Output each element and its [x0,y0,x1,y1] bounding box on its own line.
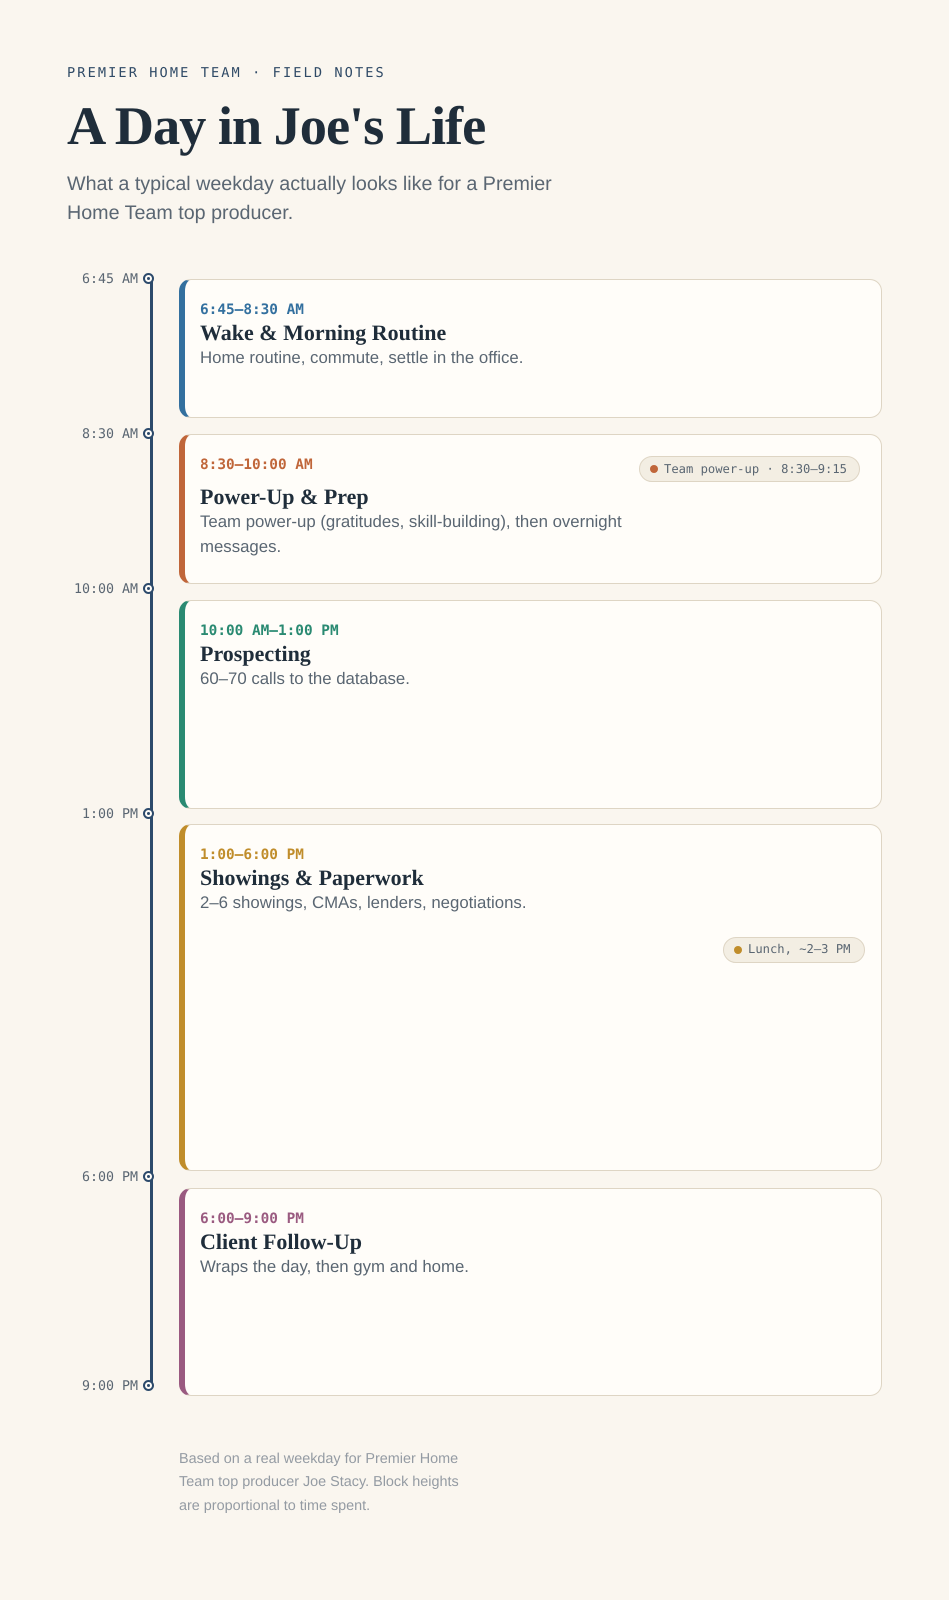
timeline axis [150,278,153,1385]
timeline marker: 8:30 AM [143,428,154,439]
block heading: Prospecting [200,641,311,666]
block heading: Wake & Morning Routine [200,320,446,345]
time range: 6:00–9:00 PM [200,1210,304,1226]
callout: lunch: Lunch, ~2–3 PM [748,942,850,956]
time label: 8:30 AM: 8:30 AM [82,427,138,442]
time label: 10:00 AM: 10:00 AM [74,582,138,597]
panel: client follow-up [179,1188,882,1396]
time label: 9:00 PM: 9:00 PM [82,1379,138,1394]
description: 2–6 showings, CMAs, lenders, negotiations. [200,893,526,912]
description: Home routine, commute, settle in the office. [200,348,523,367]
panel: power-up and prep [179,434,882,584]
block heading: Client Follow-Up [200,1229,362,1254]
callout: lunch [723,937,865,963]
time label: 6:00 PM: 6:00 PM [82,1170,138,1185]
time label: 6:45 AM: 6:45 AM [82,272,138,287]
description: 60–70 calls to the database. [200,669,410,688]
block heading: Power-Up & Prep [200,484,369,509]
description: Team power-up (gratitudes, skill-building), then overnight messages. [200,512,622,556]
time label: 1:00 PM: 1:00 PM [82,807,138,822]
panel: wake and morning routine [179,279,882,418]
timeline marker: 10:00 AM [143,583,154,594]
panel: prospecting [179,600,882,809]
callout: team power-up [639,456,860,482]
time range: 8:30–10:00 AM [200,456,313,472]
footnote: Based on a real weekday for Premier Home Team top producer Joe Stacy. Block heights are proportional to time spent. [179,1451,459,1514]
timeline marker: 6:00 PM [143,1171,154,1182]
timeline marker: 1:00 PM [143,808,154,819]
block heading: Showings & Paperwork [200,865,424,890]
subtitle: What a typical weekday actually looks like for a Premier Home Team top producer. [67,172,552,224]
panel: showings and paperwork [179,824,882,1171]
timeline marker: 9:00 PM [143,1380,154,1391]
title: A Day in Joe's Life [67,96,485,156]
eyebrow: PREMIER HOME TEAM · FIELD NOTES [67,65,386,81]
time range: 10:00 AM–1:00 PM [200,622,339,638]
callout: team power-up: Team power-up · 8:30–9:15 [664,462,847,476]
time range: 1:00–6:00 PM [200,846,304,862]
time range: 6:45–8:30 AM [200,302,304,318]
timeline marker: 6:45 AM [143,273,154,284]
description: Wraps the day, then gym and home. [200,1257,469,1276]
